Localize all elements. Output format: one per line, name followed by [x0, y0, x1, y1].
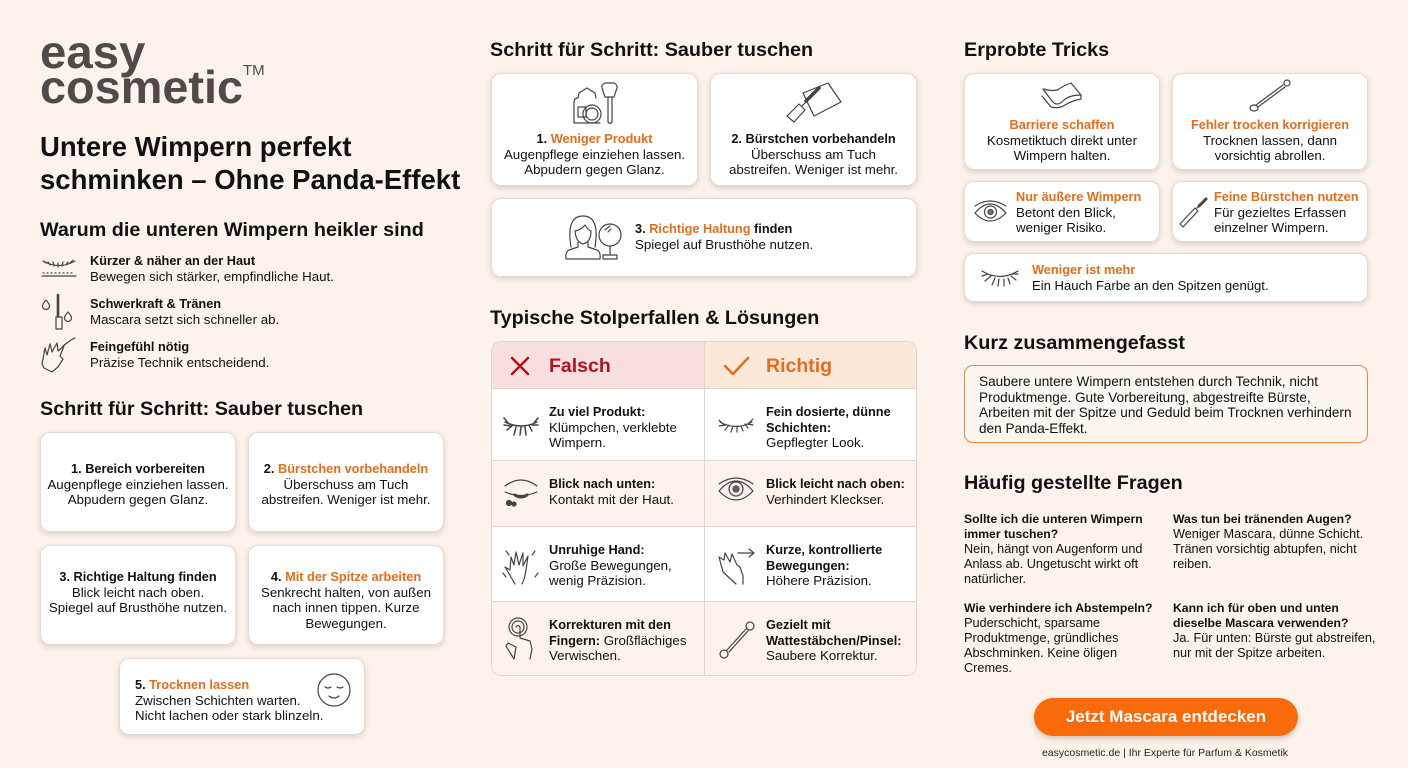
faq: frage 2: Was tun bei tränenden Augen? [1173, 512, 1352, 526]
card: barriere: Wimpern halten. [1014, 148, 1110, 163]
row 2: Blick nach unten: [549, 476, 655, 491]
card: schritt 4: Bewegungen. [305, 616, 387, 630]
icon: finger touch [505, 617, 533, 660]
heading: faq: Häufig gestellte Fragen [964, 472, 1183, 494]
faq: frage 3: Cremes. [964, 661, 1012, 675]
icon: lashes [981, 270, 1019, 287]
header: richtig: Richtig [766, 355, 832, 377]
card: bürstchen: Überschuss am Tuch [751, 146, 876, 162]
list: gründe [41, 253, 334, 373]
heading: schritt für schritt mitte: Schritt für Schritt: Sauber tuschen [490, 39, 813, 61]
card: haltung: Spiegel auf Brusthöhe nutzen. [635, 236, 813, 252]
icon: lower lashes [41, 259, 77, 277]
card: weniger produkt: Abpudern gegen Glanz. [524, 162, 665, 177]
title: Untere Wimpern perfekt [40, 131, 351, 162]
header: richtig [704, 342, 918, 388]
faq: frage 1: natürlicher. [964, 572, 1026, 586]
row 2: Verhindert Kleckser. [766, 492, 884, 506]
card: schritt 2: 2. Bürstchen vorbehandeln [264, 461, 428, 476]
footer: easycosmetic.de | Ihr Experte für Parfum & Kosmetik [1042, 747, 1288, 759]
callout: zusammenfassung: Arbeiten mit der Spitze und Geduld beim Trocknen verhindern [979, 405, 1352, 420]
callout: zusammenfassung: Produktmenge. Gute Vorbereitung, abgestreifte Bürste, [979, 390, 1311, 404]
card: fehler korrigieren: vorsichtig abrollen. [1215, 148, 1325, 163]
card: haltung: 3. Richtige Haltung finden [635, 221, 792, 236]
icon: calm hand and arrow [718, 548, 755, 585]
heading: schritt für schritt links: Schritt für Schritt: Sauber tuschen [40, 398, 363, 420]
button: mascara entdecken [1034, 698, 1298, 736]
card: schritt 3: Blick leicht nach oben. [72, 584, 204, 600]
card: haltung [491, 198, 917, 277]
row 3: Große Bewegungen, [549, 558, 672, 572]
card: weniger produkt: Augenpflege einziehen lassen. [504, 146, 685, 162]
faq: frage 3: Wie verhindere ich Abstempeln? [964, 601, 1152, 615]
faq: frage 3: Abschminken. Keine öligen [964, 646, 1117, 660]
row 3: Kurze, kontrollierte [766, 542, 882, 557]
faq: frage 1: immer tuschen? [964, 527, 1058, 541]
icon: check [724, 356, 750, 376]
table header [492, 342, 918, 389]
card: schritt 3: 3. Richtige Haltung finden [59, 569, 217, 584]
icon: cross [510, 356, 530, 376]
card: schritt 5: 5. Trocknen lassen [135, 677, 249, 692]
faq: frage 1: Nein, hängt von Augenform und [964, 542, 1142, 556]
faq: frage 1 [964, 512, 1143, 586]
row 1 [492, 389, 918, 461]
callout: zusammenfassung [964, 365, 1368, 443]
card: schritt 4 [248, 545, 444, 645]
item: schwerkraft: Schwerkraft & Tränen [90, 296, 221, 311]
card: schritt 1: Augenpflege einziehen lassen. [47, 476, 229, 492]
header: falsch: Falsch [549, 355, 611, 377]
title: schminken – Ohne Panda-Effekt [40, 164, 460, 194]
row 4: Verwischen. [549, 648, 621, 663]
card: schritt 1: 1. Bereich vorbereiten [71, 461, 205, 476]
heading: warum heikler: Warum die unteren Wimpern heikler sind [40, 219, 424, 241]
row 4: Fingern: Großflächiges [549, 632, 686, 648]
icon: eye looking down [504, 479, 538, 507]
icon: fine lashes [718, 418, 754, 433]
card: weniger ist mehr: Ein Hauch Farbe an den Spitzen genügt. [1032, 278, 1269, 292]
icon: clumpy lashes [503, 417, 539, 436]
row 1: Klümpchen, verklebte [549, 420, 677, 434]
heading: kurz zusammengefasst: Kurz zusammengefasst [964, 332, 1185, 354]
card: schritt 5: Nicht lachen oder stark blinzeln. [135, 708, 323, 723]
faq: frage 4: Kann ich für oben und unten [1173, 601, 1339, 615]
card: schritt 3 [40, 545, 236, 645]
faq: frage 1: Anlass ab. Ungetuscht wirkt oft [964, 557, 1138, 571]
card: schritt 1: Abpudern gegen Glanz. [68, 492, 208, 507]
faq: frage 3: Puderschicht, sparsame [964, 616, 1100, 630]
item: schwerkraft [42, 294, 279, 330]
logo: easy [40, 26, 145, 78]
card: schritt 3: Spiegel auf Brusthöhe nutzen. [49, 600, 227, 615]
card: weniger produkt: 1. Weniger Produkt [537, 131, 652, 146]
item: kürzer und näher [41, 253, 334, 284]
faq: frage 3: Produktmenge, gründliches [964, 631, 1118, 645]
card: weniger ist mehr: Weniger ist mehr [1032, 262, 1135, 277]
logo: cosmetic [40, 61, 243, 113]
card: schritt 1 [40, 432, 236, 532]
button: mascara entdecken: Jetzt Mascara entdecken [1066, 707, 1266, 726]
card: feine bürstchen: einzelner Wimpern. [1214, 220, 1329, 235]
item: feingefühl [41, 337, 269, 373]
faq: frage 2 [1173, 512, 1363, 571]
icon: shaky hand [502, 550, 539, 585]
callout: zusammenfassung: den Panda-Effekt. [979, 420, 1088, 436]
card: fehler korrigieren: Trocknen lassen, dann [1203, 132, 1337, 148]
card: feine bürstchen: Für gezieltes Erfassen [1214, 204, 1346, 220]
faq: frage 4: dieselbe Mascara verwenden? [1173, 616, 1348, 630]
icon: eye looking up [718, 477, 754, 501]
row 2: Kontakt mit der Haut. [549, 492, 674, 506]
row 4: Korrekturen mit den [549, 617, 671, 632]
card: schritt 5 [119, 658, 365, 735]
row 3 [492, 527, 918, 602]
row 3: wenig Präzision. [549, 573, 646, 588]
row 3: Unruhige Hand: [549, 542, 645, 557]
row 4: Gezielt mit [766, 617, 830, 632]
heading: stolperfallen: Typische Stolperfallen & Lösungen [490, 307, 819, 329]
icon: woman with mirror [565, 215, 622, 260]
logo: TM [243, 62, 265, 79]
table: falsch und richtig [491, 341, 917, 676]
row 3: Höhere Präzision. [766, 573, 872, 588]
card: barriere: Barriere schaffen [1010, 117, 1114, 132]
row 1: Gepflegter Look. [766, 435, 864, 450]
card: fehler korrigieren [1172, 73, 1368, 170]
card: barriere: Kosmetiktuch direkt unter [987, 132, 1137, 148]
card: äußere wimpern [964, 181, 1160, 242]
card: weniger ist mehr [964, 253, 1368, 302]
row 1: Fein dosierte, dünne [766, 404, 891, 419]
row 1: Schichten: [766, 420, 831, 434]
row 4: Wattestäbchen/Pinsel: [766, 632, 902, 648]
row 4 [492, 602, 918, 677]
callout: zusammenfassung: Saubere untere Wimpern entstehen durch Technik, nicht [979, 374, 1318, 389]
row 4: Saubere Korrektur. [766, 648, 878, 663]
icon: jar and brush [573, 82, 618, 124]
card: feine bürstchen: Feine Bürstchen nutzen [1214, 189, 1359, 204]
faq: frage 4: nur mit der Spitze arbeiten. [1173, 646, 1325, 660]
icon: cotton swab [719, 621, 755, 659]
card: schritt 4: Senkrecht halten, von außen [261, 584, 431, 600]
card: äußere wimpern: weniger Risiko. [1016, 220, 1106, 235]
icon: swab [1249, 79, 1291, 112]
icon: tissue [1041, 82, 1082, 108]
item: kürzer und näher: Bewegen sich stärker, empfindliche Haut. [90, 268, 334, 284]
faq: frage 4: Ja. Für unten: Bürste gut abstreifen, [1173, 631, 1375, 645]
icon: fine brush [1179, 197, 1208, 228]
card: schritt 2 [248, 432, 444, 532]
heading: erprobte tricks: Erprobte Tricks [964, 39, 1109, 61]
row 1: Zu viel Produkt: [549, 404, 645, 419]
card: bürstchen: 2. Bürstchen vorbehandeln [731, 131, 896, 146]
card: schritt 2: Überschuss am Tuch [284, 476, 408, 492]
row 3: Bewegungen: [766, 558, 850, 572]
card: barriere [964, 73, 1160, 170]
card: weniger produkt [491, 73, 698, 186]
row 2: Blick leicht nach oben: [766, 476, 905, 491]
icon: mascara on tissue [786, 82, 842, 123]
faq: frage 2: Tränen vorsichtig abtupfen, nicht [1173, 542, 1357, 556]
item: feingefühl: Präzise Technik entscheidend. [90, 354, 269, 370]
card: bürstchen: abstreifen. Weniger ist mehr. [729, 162, 898, 177]
card: schritt 4: 4. Mit der Spitze arbeiten [271, 569, 421, 584]
faq: frage 2: Weniger Mascara, dünne Schicht. [1173, 527, 1363, 541]
logo [40, 26, 265, 113]
icon: relaxed face [317, 673, 351, 707]
item: kürzer und näher: Kürzer & näher an der Haut [90, 253, 255, 268]
divider [704, 389, 705, 677]
icon: mascara and tears [42, 294, 72, 330]
title [40, 131, 460, 194]
faq: frage 1: Sollte ich die unteren Wimpern [964, 512, 1143, 526]
card: äußere wimpern: Nur äußere Wimpern [1016, 189, 1141, 204]
icon: eye [974, 200, 1007, 222]
faq: frage 2: reiben. [1173, 557, 1212, 571]
card: schritt 4: nach innen tippen. Kurze [272, 600, 420, 615]
row 2 [492, 461, 918, 527]
header: falsch [492, 342, 704, 388]
faq: frage 4 [1173, 601, 1375, 660]
card: schritt 2: abstreifen. Weniger ist mehr. [262, 492, 430, 507]
card: bürstchen [710, 73, 917, 186]
card: schritt 5: Zwischen Schichten warten. [135, 692, 301, 708]
card: feine bürstchen [1172, 181, 1368, 242]
item: schwerkraft: Mascara setzt sich schneller ab. [90, 312, 279, 326]
faq: frage 3 [964, 601, 1152, 675]
card: fehler korrigieren: Fehler trocken korrigieren [1191, 117, 1349, 132]
icon: hand with brush [41, 337, 76, 373]
row 1: Wimpern. [549, 435, 606, 450]
card: äußere wimpern: Betont den Blick, [1016, 204, 1116, 220]
item: feingefühl: Feingefühl nötig [90, 339, 189, 354]
